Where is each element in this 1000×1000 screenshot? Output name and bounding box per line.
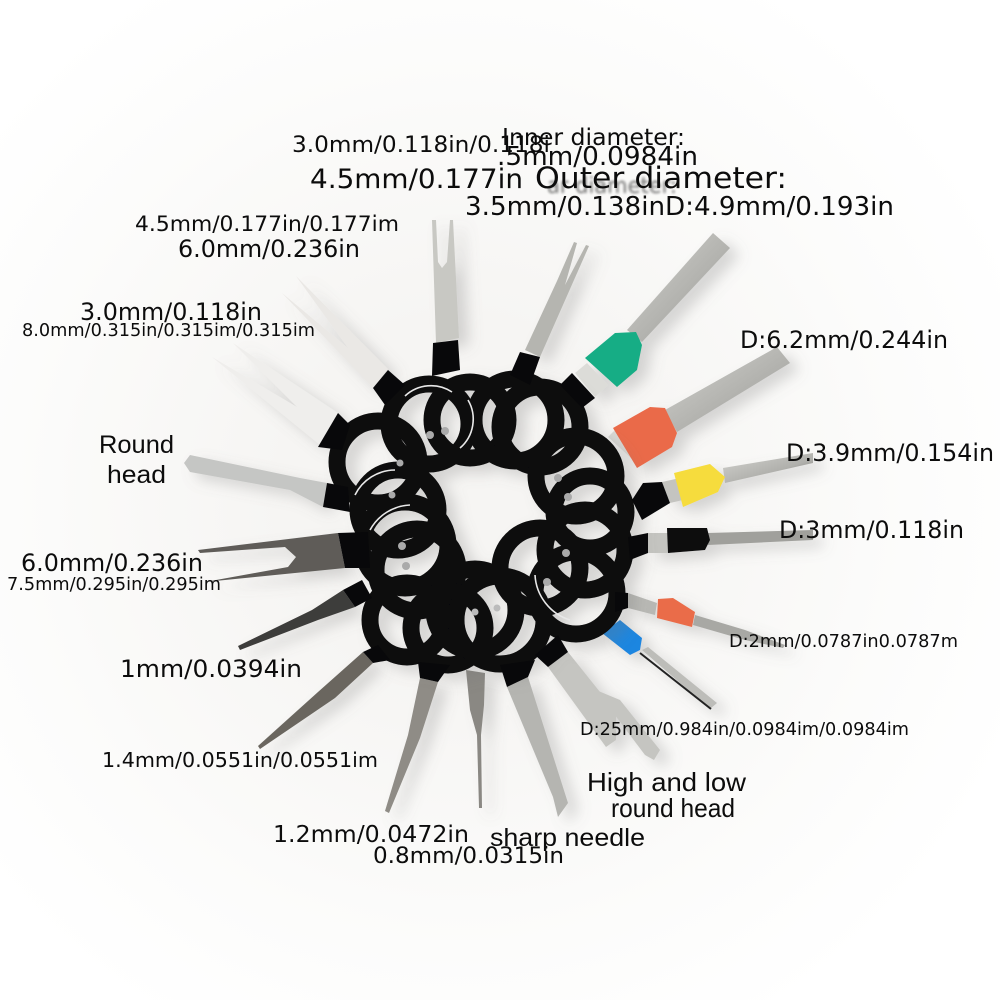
label: D6.2mm: D:6.2mm/0.244in	[740, 326, 948, 354]
tool: lower left pin	[258, 652, 373, 749]
label: high and low round head: High and low	[587, 767, 746, 797]
label: 4.5mm fork: 4.5mm/0.177in/0.177im	[135, 212, 399, 237]
label: 1mm: 1mm/0.0394in	[120, 655, 302, 683]
label: D3.9mm: D:3.9mm/0.154in	[786, 439, 994, 467]
label: D2mm: D:2mm/0.0787in0.0787m	[729, 632, 958, 652]
label: round head: head	[107, 461, 166, 489]
tool: U fork	[198, 533, 345, 582]
label: 1.2mm: 1.2mm/0.0472in	[273, 820, 469, 848]
tool: thin pin	[238, 590, 355, 650]
label: 1.4mm: 1.4mm/0.0551in/0.0551im	[102, 748, 378, 772]
terminal: blue	[602, 620, 717, 709]
label: inner value: .5mm/0.0984in	[497, 142, 698, 172]
tool: wide fork	[282, 276, 388, 388]
terminal: green	[575, 233, 730, 397]
label: sharp needle: sharp needle	[490, 824, 645, 852]
measurement labels	[7, 125, 994, 869]
label: D25mm: D:25mm/0.984in/0.0984im/0.0984im	[580, 720, 909, 740]
label: 6.0mm U: 6.0mm/0.236in	[21, 549, 203, 577]
tool: left wide fork	[212, 343, 338, 445]
terminal: black	[648, 528, 813, 553]
black rings	[337, 379, 626, 665]
tool: sharp needle	[507, 677, 568, 817]
tool set: metal blades	[184, 220, 813, 817]
label: 3.0mm fork: 3.0mm/0.118in	[80, 298, 262, 326]
tool: needle 1.2	[385, 678, 438, 813]
tool: top right fork	[525, 242, 589, 357]
label: 4.5mm: 4.5mm/0.177in	[310, 164, 523, 195]
label: 0.8mm: 0.8mm/0.0315in	[373, 844, 564, 869]
ring handles	[318, 340, 670, 687]
label: round head	[99, 431, 174, 489]
label: 6.0mm fork: 6.0mm/0.236in	[178, 235, 360, 263]
label: high and low round head	[587, 767, 746, 823]
label: outer diameter: Outer diameter:	[535, 161, 787, 195]
label: D3mm: D:3mm/0.118in	[779, 516, 964, 544]
label: high and low round head: round head	[611, 793, 735, 823]
terminal: small orange	[628, 593, 785, 648]
tool: top fork	[432, 220, 459, 343]
label: inner diameter: Inner diameter:	[502, 125, 685, 151]
label: round head: Round	[99, 431, 174, 459]
terminal: orange	[608, 347, 790, 468]
label: 3.5mm D4.9: 3.5mm/0.138inD:4.9mm/0.193in	[465, 192, 894, 222]
label: 7.5mm: 7.5mm/0.295in/0.295im	[7, 575, 221, 595]
tool: round head	[184, 455, 327, 507]
tool: needle 0.8	[466, 670, 485, 808]
ring highlights and chain beads	[355, 386, 572, 620]
terminal: yellow	[662, 453, 813, 507]
label: ghost text: ar diameter:	[547, 174, 677, 199]
label: 8.0mm: 8.0mm/0.315in/0.315im/0.315im	[22, 321, 315, 341]
tool: high and low round head	[548, 652, 660, 760]
label: top: 3.0mm/0.118in/0.118i	[292, 133, 550, 158]
